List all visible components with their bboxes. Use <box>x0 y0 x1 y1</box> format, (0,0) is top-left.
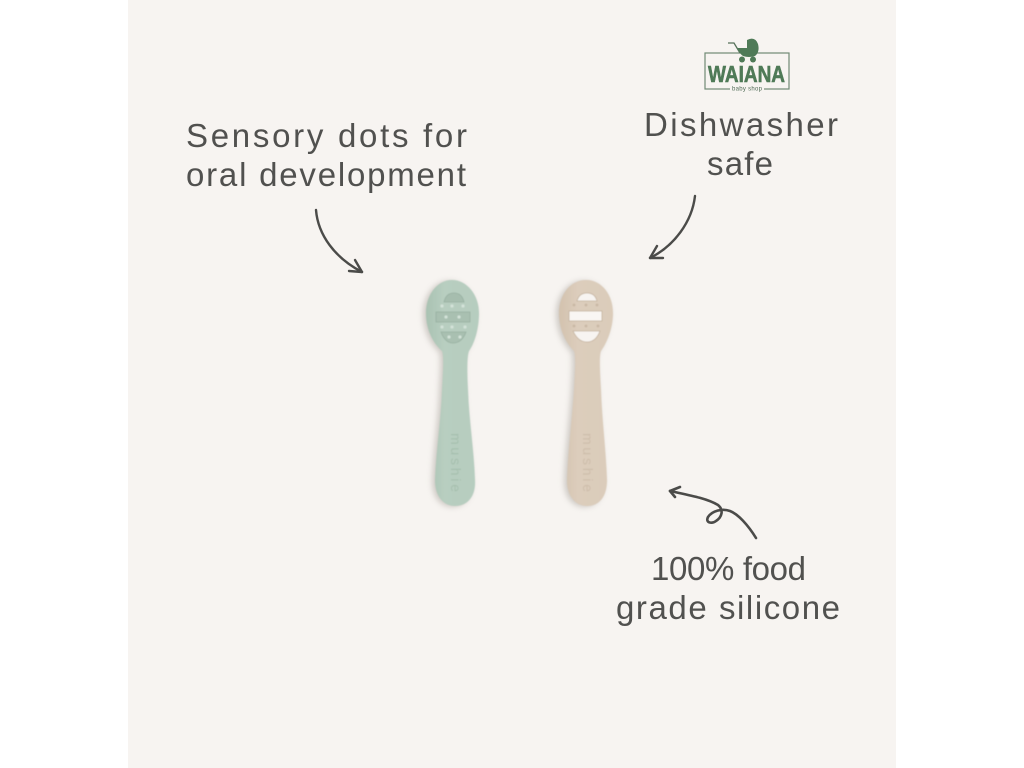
logo: Waiana baby shop: baby shop <box>732 86 763 92</box>
embossed brand: mushie <box>580 433 596 492</box>
background panel <box>128 0 896 768</box>
head slots and dots <box>569 293 602 342</box>
callout: sensory dots <box>186 117 467 193</box>
icon: baby pram <box>728 39 759 62</box>
logo: Waiana baby shop: WAIANA <box>708 61 785 87</box>
embossed brand: mushie <box>448 433 464 492</box>
callout: food grade silicone: 100% food <box>651 550 806 587</box>
arrow: to beige spoon <box>650 196 695 258</box>
spoon: sage green <box>423 280 479 507</box>
callout: dishwasher safe: safe <box>707 145 773 182</box>
arrow: to green spoon <box>316 210 362 272</box>
arrow: curly to silicone spoon <box>670 487 756 538</box>
callout: dishwasher safe <box>644 106 838 182</box>
callout: sensory dots: Sensory dots for <box>186 117 467 154</box>
spoon: beige <box>556 280 613 507</box>
logo: Waiana baby shop <box>705 39 789 92</box>
callout: dishwasher safe: Dishwasher <box>644 106 838 143</box>
callout: food grade silicone: grade silicone <box>616 589 840 626</box>
callout: food grade silicone <box>616 550 840 626</box>
head slots and dots <box>436 293 470 343</box>
callout: sensory dots: oral development <box>186 156 466 193</box>
